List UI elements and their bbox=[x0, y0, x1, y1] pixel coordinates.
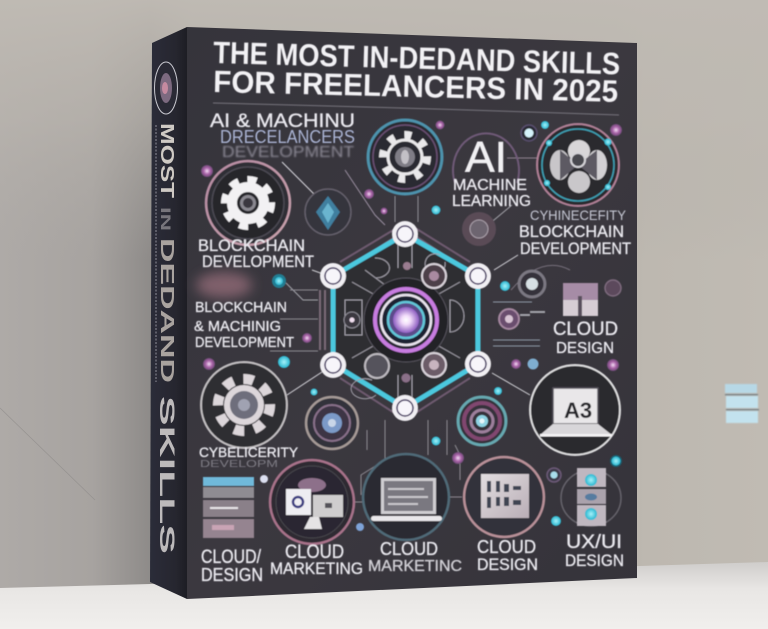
box front cover bbox=[187, 27, 637, 599]
central core rings bbox=[364, 278, 448, 362]
small icon: hex shard under gear bbox=[305, 189, 351, 235]
spine title bbox=[155, 123, 178, 554]
icon: AI badge bbox=[453, 133, 519, 183]
icon: laptop A3: A3 bbox=[564, 398, 592, 423]
icon: pink node bbox=[432, 436, 464, 464]
label: cloud design right: DESIGN bbox=[556, 340, 614, 357]
inner satellite circles bbox=[344, 262, 446, 382]
icon: blue gear top-center bbox=[368, 120, 442, 194]
spine title: IN bbox=[158, 207, 174, 231]
label: cloud/design bbox=[201, 547, 263, 585]
label: AI and machine: DEVELOPMENT bbox=[222, 144, 354, 161]
icon: iris circle bbox=[306, 397, 358, 449]
icon: AI badge: AI bbox=[465, 133, 507, 182]
label: UX/UI design: DESIGN bbox=[565, 551, 624, 570]
label: cloud marketing 1: MARKETING bbox=[270, 559, 363, 578]
hexagon nodes bbox=[320, 221, 491, 421]
label: cloud marketing 2: MARKETINC bbox=[368, 558, 462, 575]
label: blockchain and machining: & MACHINIG bbox=[194, 318, 281, 335]
box spine bbox=[150, 27, 187, 599]
label: machine learning bbox=[452, 177, 531, 210]
icon: dot between circles bbox=[356, 523, 364, 531]
label: UX/UI design: UX/UI bbox=[566, 532, 622, 553]
label: cybersecurity bottom-left: DEVELOPM bbox=[200, 459, 278, 470]
icon: laptop circle bbox=[363, 454, 449, 540]
central hexagon network bbox=[320, 221, 491, 421]
spine title: MOST bbox=[157, 123, 177, 198]
label: UX/UI design bbox=[565, 532, 624, 570]
label: cybersecurity bottom-left bbox=[199, 444, 299, 470]
label: blockchain development left bbox=[198, 236, 314, 271]
icon: cloud design square bbox=[563, 283, 598, 316]
label: AI and machine: DRECELANCERS bbox=[220, 127, 355, 147]
title: THE MOST IN-DEDAND SKILLS bbox=[213, 35, 621, 81]
label: cybersecurity bottom-left: CYBELICERITY bbox=[199, 444, 299, 460]
icon: dim lens upper right of hexagon bbox=[462, 212, 496, 246]
dots mid-left bbox=[203, 274, 318, 396]
icon: gear top-left bbox=[206, 161, 290, 245]
label: cloud design right: CLOUD bbox=[553, 319, 618, 340]
small wall sticker icon bbox=[725, 384, 759, 423]
label: cloud marketing 1 bbox=[270, 542, 363, 578]
label: cloud design bottom bbox=[477, 537, 538, 574]
blurred smudge icon bbox=[196, 272, 252, 298]
spine title: DEDAND bbox=[157, 238, 177, 383]
icon: list panel bbox=[203, 475, 268, 538]
label: machine learning: LEARNING bbox=[452, 193, 531, 210]
connector lines bbox=[270, 158, 570, 502]
label: AI and machine bbox=[210, 111, 355, 161]
label: blockchain development right: BLOCKCHAIN bbox=[519, 222, 624, 241]
label: cloud marketing 2 bbox=[368, 539, 462, 575]
spine title: SKILLS bbox=[155, 396, 178, 554]
label: machine learning: MACHINE bbox=[453, 177, 527, 194]
icon: cross badge top-right bbox=[537, 124, 619, 206]
label: cloud design bottom: DESIGN bbox=[477, 555, 538, 574]
label: cloud/design: CLOUD/ bbox=[201, 547, 262, 568]
icon: dots near UX stack bbox=[547, 455, 622, 526]
icon: grid panel circle bbox=[464, 457, 544, 537]
icon: swirl rings bbox=[458, 397, 506, 445]
icon: gear bottom-left bbox=[201, 362, 287, 448]
label: cloud design right bbox=[553, 319, 618, 357]
title: FOR FREELANCERS IN 2025 bbox=[213, 64, 619, 109]
label: blockchain development left: DEVELOPMENT bbox=[202, 252, 314, 271]
icon: monitors circle bbox=[270, 460, 354, 544]
title bbox=[213, 35, 621, 109]
label: cloud/design: DESIGN bbox=[201, 565, 263, 585]
label: cloud marketing 1: CLOUD bbox=[285, 542, 344, 563]
floor bbox=[0, 562, 768, 629]
label: AI and machine: AI & MACHINU bbox=[210, 111, 355, 132]
label: cloud design bottom: CLOUD bbox=[477, 537, 536, 557]
label: blockchain and machining bbox=[194, 299, 294, 351]
icon: laptop A3 bbox=[530, 365, 620, 455]
icon: UX/UI stack bbox=[561, 468, 621, 526]
small accent dots top bbox=[201, 120, 622, 214]
label: blockchain development right bbox=[519, 222, 631, 258]
label: cloud marketing 2: CLOUD bbox=[380, 539, 438, 559]
label: blockchain and machining: BLOCKCHAIN bbox=[195, 299, 287, 316]
label: cybersecurity top-right: CYHINECEFITY bbox=[530, 207, 627, 223]
main artwork bbox=[194, 35, 631, 585]
label: blockchain development left: BLOCKCHAIN bbox=[198, 236, 305, 255]
label: blockchain development right: DEVELOPMENT bbox=[520, 239, 631, 258]
spine logo bbox=[154, 62, 178, 114]
label: blockchain and machining: DEVELOPMENT bbox=[195, 334, 294, 351]
icon: lens and dots right bbox=[494, 271, 621, 395]
